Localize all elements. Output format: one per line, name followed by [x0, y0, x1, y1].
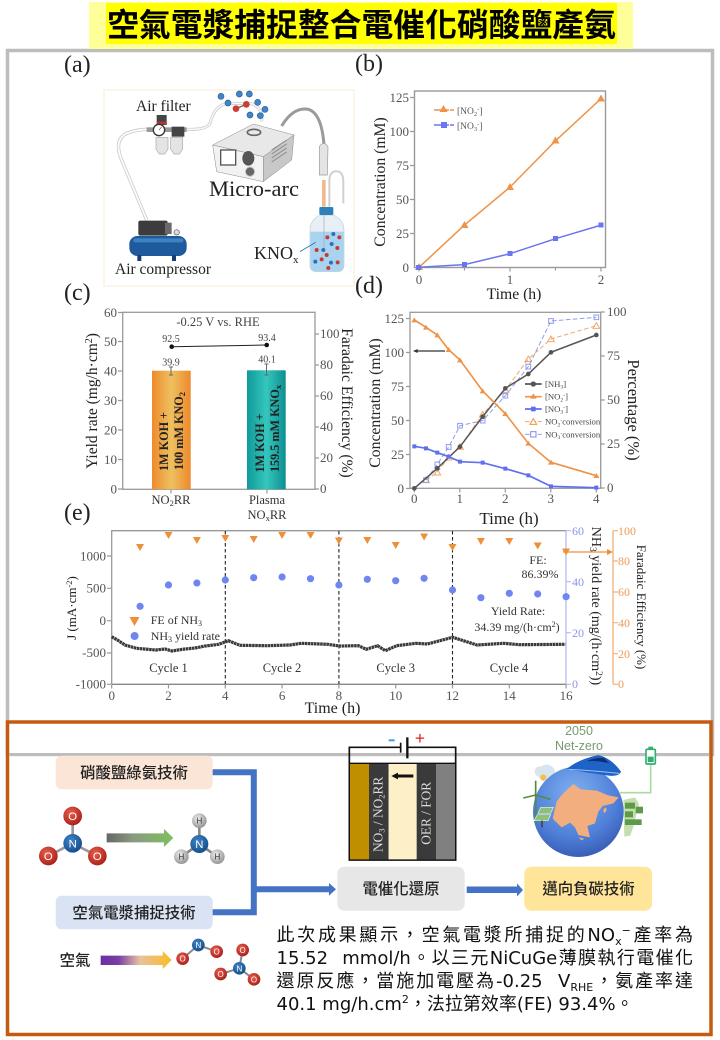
- orange right axis: 40: [618, 616, 630, 630]
- panel c: yield bar chart: x: [266, 513, 271, 523]
- text block: results summary: 還原反應，當施加電壓為-0.25 VRHE，氨產率達: [276, 971, 693, 994]
- panel c: yield bar chart: -0.25 V vs. RHE: [176, 315, 260, 329]
- legend d: 2: [560, 397, 563, 403]
- panel d: conversion chart: 75: [391, 379, 404, 394]
- panel c: yield bar chart: 0: [320, 481, 326, 496]
- icon: setup illustration: [118, 91, 344, 272]
- arrow to negative carbon box: [467, 884, 523, 896]
- legend d: conversion: [562, 429, 601, 439]
- panel c: yield bar chart: 80: [320, 357, 333, 372]
- legend e: FE of NH: [151, 613, 198, 627]
- legend b: [NO: [457, 107, 474, 117]
- panel c: yield bar chart: RR: [174, 493, 191, 507]
- outer gray frame: [8, 50, 712, 754]
- panel c: yield bar chart: 20: [320, 450, 333, 465]
- panel c: yield bar chart: NO: [152, 493, 170, 507]
- panel c: yield bar chart: 93.4: [258, 333, 276, 344]
- panel e: cycling stability chart: 16: [560, 688, 573, 703]
- label: 2050 net-zero: [555, 724, 603, 753]
- panel c: yield bar chart: 40: [104, 364, 117, 378]
- series: NO3-: [412, 444, 598, 490]
- orange right axis: 80: [618, 554, 630, 568]
- panel d: conversion chart: 25: [391, 447, 404, 462]
- panel e: cycling stability chart: 6: [279, 688, 286, 703]
- micro-arc box: [213, 124, 294, 157]
- gas tube to bottle: [282, 109, 324, 145]
- annotations: ): [556, 620, 560, 634]
- label: Air filter: Air filter: [136, 98, 191, 115]
- panel e: cycling stability chart: 2: [165, 688, 172, 703]
- legend d: [NH: [545, 379, 560, 389]
- legend e: yield rate: [172, 629, 220, 643]
- legend e: 3: [168, 635, 172, 644]
- orange right axis: [613, 524, 636, 691]
- panel d: conversion chart: Percentage (%): [624, 359, 643, 461]
- legend d: -: [563, 393, 565, 399]
- blue right axis: 0: [572, 677, 578, 691]
- legend b: ]: [479, 107, 482, 117]
- panel e: cycling stability chart: 500: [86, 580, 106, 596]
- icon: electrochemical cell: 3: [377, 828, 387, 833]
- bar: NO2RR: 1M KOH +: [157, 412, 171, 471]
- panel c: yield bar chart: 2: [84, 338, 95, 343]
- panel c: yield bar chart: Faradaic Efficiency (%): [338, 328, 355, 478]
- legend d: ]: [565, 404, 568, 414]
- panel e: cycling stability chart: Faradaic Efficiency (%): [634, 545, 649, 669]
- orange right axis: 100: [618, 524, 636, 538]
- icon: nitrate to ammonia reaction: [39, 807, 225, 865]
- panel d: conversion chart: Concentration (mM): [367, 338, 384, 468]
- cycle labels: Cycle 2: [263, 661, 301, 675]
- panel d: conversion chart: 75: [607, 348, 620, 363]
- icon: electrochemical cell: OER / FOR: [419, 782, 434, 845]
- panel c: yield bar chart: 0: [110, 482, 117, 496]
- bar: NO2RR: 100 mM KNO: [172, 396, 186, 470]
- legend e: NH: [151, 629, 168, 643]
- panel b: concentration chart: 50: [396, 192, 409, 207]
- panel b: concentration chart: 100: [390, 124, 409, 139]
- panel d: conversion chart: 0: [607, 480, 614, 495]
- orange right axis: 20: [618, 647, 630, 661]
- series: current density: [112, 637, 565, 651]
- series: NO3 conversion: [424, 315, 599, 482]
- panel d: conversion chart: 0: [398, 481, 404, 496]
- box: air plasma capture technology: 空氣電漿捕捉技術: [72, 904, 196, 922]
- legend b: -: [477, 121, 479, 128]
- blue right axis: 20: [572, 626, 584, 640]
- icon: nitrate to ammonia reaction: O: [68, 811, 77, 823]
- panel a: experimental setup: (a): [64, 52, 91, 78]
- panel e: cycling stability chart: 3: [587, 547, 597, 552]
- legend b: [NO: [457, 122, 474, 132]
- panel e: cycling stability chart: 10: [389, 688, 402, 703]
- icon: nitrate to ammonia reaction: O: [93, 851, 102, 863]
- legend d: [NO: [545, 404, 560, 414]
- label: Micro-arc: Micro-arc: [209, 176, 299, 201]
- panel d: conversion chart: 3: [548, 491, 554, 506]
- panel d: conversion chart: [355, 273, 643, 528]
- panel d: conversion chart: (d): [355, 273, 383, 299]
- legend b: -: [477, 106, 479, 113]
- bar: NO2RR: [152, 367, 191, 489]
- panel b: concentration chart: 75: [396, 158, 409, 173]
- faradaic efficiency line: [169, 343, 269, 349]
- blue right axis: [566, 524, 584, 691]
- panel d: conversion chart: 50: [607, 392, 620, 407]
- icon: air to NOx: N: [195, 941, 201, 950]
- panel c: yield bar chart: (c): [64, 280, 91, 306]
- icon: electrochemical cell: NO: [371, 833, 386, 852]
- panel b: concentration chart: Time (h): [487, 286, 541, 303]
- annotations: Yield Rate:: [491, 604, 545, 618]
- legend d: 2: [558, 422, 561, 428]
- label: 2050 net-zero: 2050: [565, 724, 593, 738]
- panel d: conversion chart: 2: [502, 491, 509, 506]
- box: toward negative carbon: 邁向負碳技術: [542, 880, 635, 898]
- series: NO3-: [416, 222, 604, 270]
- annotations: 86.39%: [522, 567, 558, 581]
- gas molecules: [218, 91, 268, 119]
- annotations: [474, 553, 560, 634]
- icon: nitrate to ammonia reaction: H: [214, 853, 220, 862]
- panel d: conversion chart: 1: [457, 491, 463, 506]
- panel e: cycling stability chart: NH: [588, 527, 603, 547]
- panel d: conversion chart: 25: [607, 436, 620, 451]
- panel e: cycling stability chart: -1000: [76, 676, 106, 692]
- legend d: -: [560, 430, 562, 436]
- panel e: cycling stability chart: Time (h): [305, 700, 360, 717]
- box: nitrate green ammonia technology: 硝酸鹽綠氨技術: [80, 763, 188, 782]
- legend d: ]: [563, 379, 566, 389]
- cycle labels: [149, 661, 529, 675]
- panel e: cycling stability chart: 8: [336, 688, 342, 703]
- panel b: concentration chart: (b): [355, 51, 383, 77]
- label: 2050 net-zero: Net-zero: [555, 739, 603, 753]
- panel e: cycling stability chart: -2: [64, 580, 74, 588]
- icon: nitrate to ammonia reaction: H: [196, 817, 202, 826]
- label: Air compressor: Air compressor: [115, 261, 212, 278]
- panel e: cycling stability chart: 4: [222, 688, 229, 703]
- panel e: cycling stability chart: 2: [593, 671, 603, 676]
- icon: electrochemical cell: 2: [377, 794, 387, 799]
- label: KNOx: KNO: [254, 243, 293, 263]
- icon: electrochemical cell: +: [415, 728, 425, 748]
- box: electrocatalytic reduction: 電催化還原: [363, 880, 439, 898]
- panel e: cycling stability chart: 1000: [80, 548, 106, 564]
- panel e: cycling stability chart: 0: [108, 688, 115, 703]
- panel c: yield bar chart: 10: [104, 452, 117, 467]
- series: FE of NH3: [136, 532, 570, 556]
- box: toward negative carbon: [524, 867, 652, 911]
- icon: electrochemical cell: [349, 728, 456, 860]
- panel a: experimental setup: [64, 52, 354, 286]
- legend b: ]: [479, 122, 482, 132]
- panel d: conversion chart: 4: [593, 491, 600, 506]
- panel e: cycling stability chart: )): [588, 676, 603, 686]
- panel b: concentration chart: 1: [507, 272, 513, 287]
- panel c: yield bar chart: [64, 280, 355, 523]
- icon: nitrate to ammonia reaction: O: [44, 851, 53, 863]
- legend d: [NO: [545, 392, 560, 402]
- arrow pointing to left axis: [413, 349, 445, 353]
- panel b: concentration chart: 125: [390, 90, 409, 105]
- legend b: 2: [474, 111, 477, 118]
- panel d: conversion chart: 50: [391, 413, 404, 428]
- bar: Plasma NOxRR: x: [273, 384, 283, 389]
- box: nitrate green ammonia technology: [56, 756, 213, 789]
- legend d: NO: [545, 417, 558, 427]
- box: electrocatalytic reduction: [337, 867, 465, 911]
- icon: air to NOx: [101, 939, 260, 986]
- panel b: concentration chart: [355, 51, 606, 303]
- panel c: yield bar chart: Plasma: [249, 493, 286, 507]
- panel c: yield bar chart: 100: [320, 326, 340, 341]
- panel c: yield bar chart: 20: [104, 422, 117, 438]
- series: NO2-: [415, 94, 605, 270]
- panel e: cycling stability chart: -500: [82, 645, 106, 660]
- panel c: yield bar chart: 40: [320, 419, 333, 434]
- series: NH3: [412, 333, 599, 491]
- icon: air to NOx: N: [236, 964, 242, 973]
- icon: air to NOx: O: [214, 948, 220, 957]
- text block: results summary: 此次成果顯示，空氣電漿所捕捉的NOx−產率為: [276, 924, 693, 948]
- compressor: [138, 221, 168, 236]
- orange right axis: 0: [618, 677, 624, 691]
- legend d: NO: [545, 429, 558, 439]
- panel d: conversion chart: 100: [607, 304, 626, 319]
- panel c: yield bar chart: 50: [104, 334, 117, 349]
- annotations: 2: [552, 620, 556, 629]
- icon: nitrate to ammonia reaction: H: [178, 853, 184, 862]
- icon: air to NOx: O: [180, 955, 186, 964]
- panel c: yield bar chart: 39.9: [162, 358, 180, 368]
- icon: electrochemical cell: RR: [371, 777, 386, 794]
- icon: nitrate to ammonia reaction: N: [69, 838, 77, 850]
- panel b: concentration chart: Concentration (mM): [372, 117, 389, 247]
- legend b: [434, 105, 482, 133]
- panel d: conversion chart: Time (h): [479, 509, 539, 528]
- legend d: 3: [560, 410, 563, 416]
- panel e: cycling stability chart: ): [64, 576, 79, 580]
- icon: air to NOx: O: [240, 946, 246, 955]
- panel c: yield bar chart: NO: [248, 508, 266, 522]
- cycle labels: Cycle 3: [376, 661, 415, 675]
- cycle labels: Cycle 1: [149, 661, 188, 675]
- panel c: yield bar chart: ): [84, 333, 101, 338]
- panel c: yield bar chart: 92.5: [162, 334, 180, 345]
- blue right axis: 40: [572, 575, 584, 589]
- panel e: cycling stability chart: J (mA·cm: [64, 588, 79, 640]
- panel b: concentration chart: 0: [416, 272, 422, 287]
- panel b: concentration chart: 2: [598, 272, 604, 287]
- panel d: conversion chart: 100: [384, 345, 404, 360]
- text block: results summary: 40.1 mg/h.cm2，法拉第效率(FE) 93.4%。: [276, 993, 634, 1015]
- panel c: yield bar chart: 60: [320, 388, 333, 403]
- flow connector lines: [212, 772, 336, 912]
- panel c: yield bar chart: 40.1: [258, 354, 276, 366]
- label: KNOx: x: [293, 254, 299, 266]
- legend d: 3: [558, 435, 561, 441]
- legend b: 3: [474, 126, 477, 133]
- label: air: 空氣: [60, 952, 90, 970]
- blue right axis: 60: [572, 524, 584, 538]
- annotations: 34.39 mg/(h·cm: [474, 620, 552, 634]
- panel e: cycling stability chart: yield rate (mg/(h·cm: [588, 552, 603, 671]
- series: NO2 conversion: [423, 323, 600, 483]
- icon: net-zero earth: [523, 747, 655, 857]
- panel c: yield bar chart: 2: [170, 498, 174, 508]
- panel: bottom summary frame: [8, 722, 711, 1034]
- panel b: concentration chart: 0: [402, 260, 409, 275]
- bar: Plasma NOxRR: 1M KOH +: [253, 413, 267, 473]
- legend d: [525, 379, 601, 441]
- panel e: cycling stability chart: 12: [446, 688, 459, 703]
- legend e: 3: [198, 619, 202, 628]
- legend e: [130, 613, 220, 644]
- box: air plasma capture technology: [56, 896, 213, 929]
- panel e: cycling stability chart: (e): [64, 500, 91, 526]
- orange right axis: 60: [618, 585, 630, 599]
- series: NO2-: [411, 317, 599, 478]
- text block: results summary: 15.52 mmol/h。以三元NiCuGe薄膜執行電催化: [276, 948, 693, 969]
- annotations: FE:: [529, 553, 547, 567]
- title banner: 空氣電漿捕捉整合電催化硝酸鹽產氨: [107, 7, 616, 43]
- legend d: -: [563, 405, 565, 411]
- legend d: 3: [560, 385, 563, 391]
- panel d: conversion chart: 0: [411, 491, 418, 506]
- orange FE arrow: [563, 549, 613, 555]
- icon: air to NOx: O: [251, 975, 257, 984]
- icon: electrochemical cell: / NO: [371, 798, 386, 828]
- panel c: yield bar chart: 30: [104, 393, 117, 408]
- series: NH3 yield rate: [136, 573, 570, 610]
- legend d: ]: [565, 392, 568, 402]
- panel b: concentration chart: 25: [396, 226, 409, 241]
- bar: Plasma NOxRR: 159.5 mM KNO: [268, 389, 282, 472]
- legend d: conversion: [562, 417, 601, 427]
- icon: air to NOx: O: [218, 970, 224, 979]
- cycle labels: Cycle 4: [490, 661, 529, 675]
- panel d: conversion chart: 125: [384, 311, 404, 326]
- text block: results summary: [276, 924, 693, 1015]
- legend d: -: [560, 418, 562, 424]
- panel e: cycling stability chart: 14: [503, 688, 516, 703]
- panel e: cycling stability chart: [64, 500, 649, 717]
- bar: NO2RR: 2: [177, 392, 187, 396]
- icon: nitrate to ammonia reaction: N: [195, 839, 203, 851]
- panel c: yield bar chart: 60: [104, 305, 117, 320]
- bar: Plasma NOxRR: [247, 364, 286, 489]
- panel c: yield bar chart: RR: [270, 508, 287, 522]
- panel c: yield bar chart: Yield rate (mg/h·cm: [84, 343, 101, 469]
- bottle: [310, 215, 344, 272]
- panel e: cycling stability chart: 0: [100, 613, 106, 628]
